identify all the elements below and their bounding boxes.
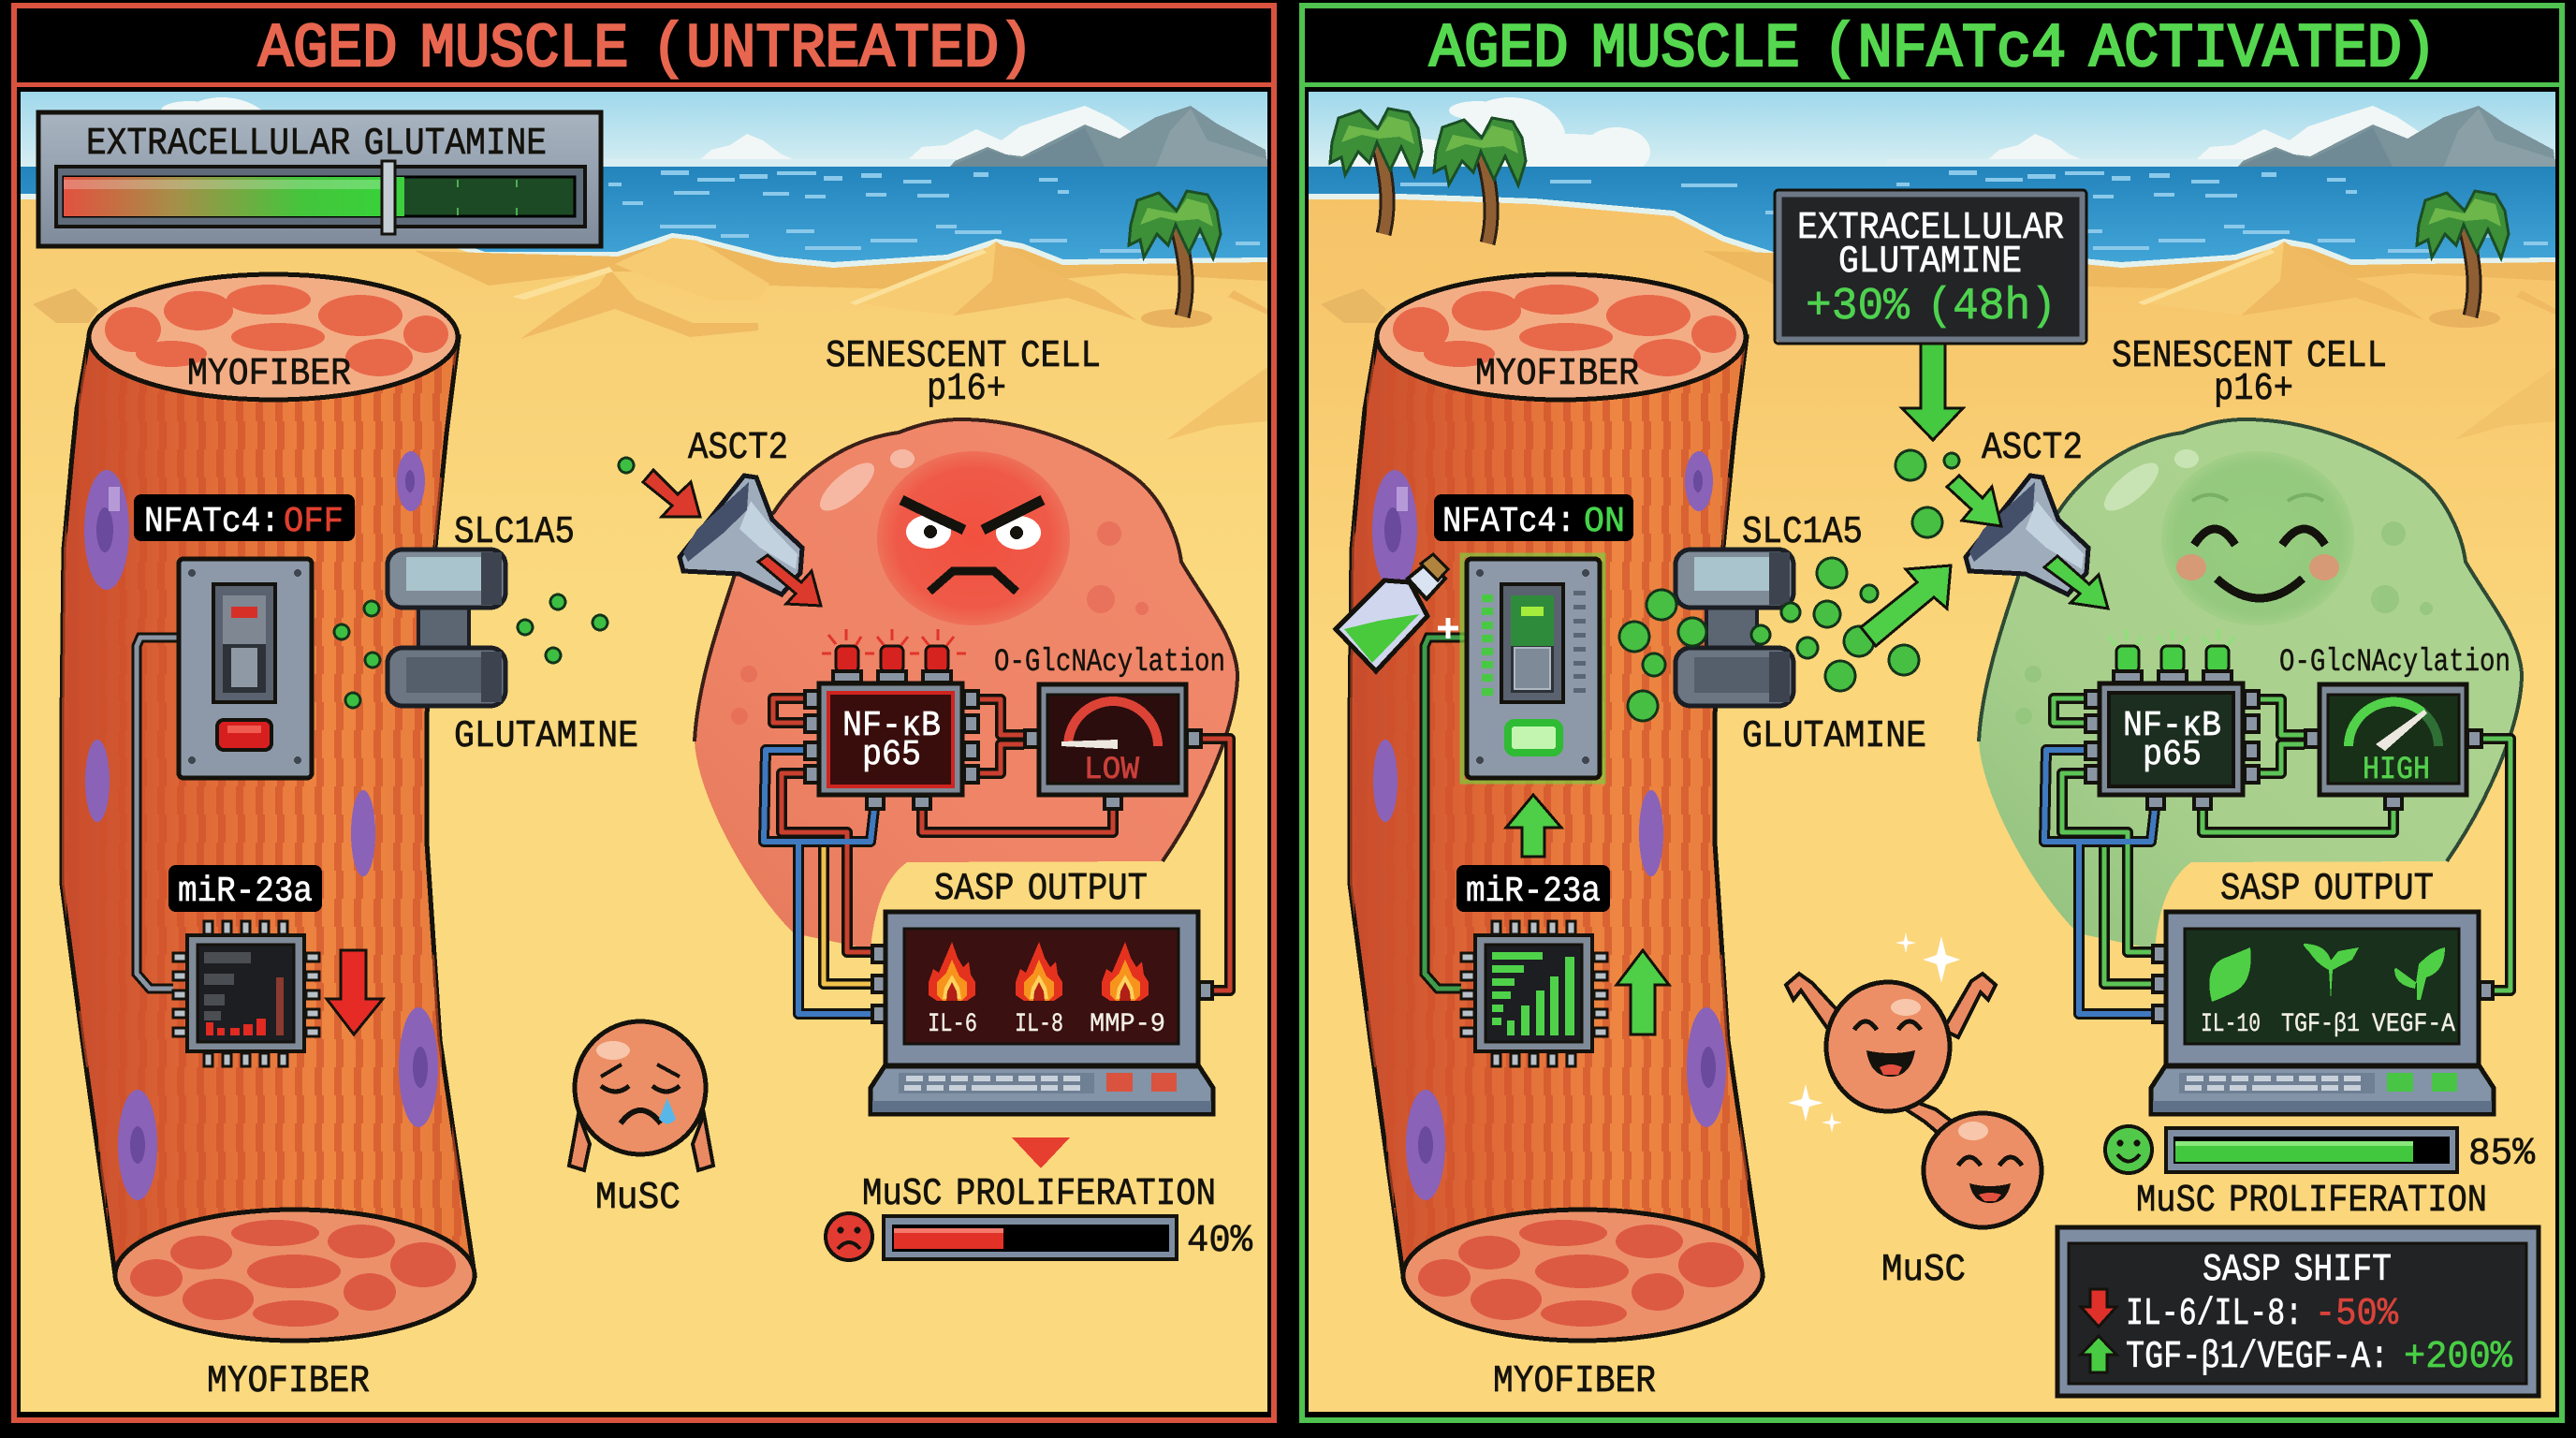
label: myofiber bottom: MYOFIBER: [207, 1360, 370, 1403]
callout: SASP shift: TGF-β1/VEGF-A:: [2126, 1336, 2389, 1379]
chip: NF-κB p65 calm: [2086, 629, 2259, 809]
panel frame: [1302, 6, 2562, 1420]
label: MuSC proliferation: MuSC PROLIFERATION: [862, 1173, 1216, 1216]
title: AGED MUSCLE (UNTREATED): [258, 14, 1033, 84]
wire inner: [1425, 638, 1467, 989]
label: NFATc4 on: ON: [1584, 502, 1625, 542]
chip: NF-κB p65 active: NF-κB: [842, 706, 941, 746]
panel: aged muscle untreated: [14, 6, 1274, 1420]
arrow: into funnel: [643, 470, 700, 517]
myofiber cylinder: [1350, 274, 1763, 1341]
label: glutamine: GLUTAMINE: [1742, 715, 1926, 758]
gauge: high: [2305, 684, 2481, 809]
callout: SASP shift: -50%: [2315, 1293, 2398, 1336]
label: MuSC proliferation: MuSC PROLIFERATION: [2136, 1180, 2487, 1223]
switch on: [1462, 555, 1603, 782]
label: p16+: p16+: [2214, 368, 2293, 411]
label: miR-23a: miR-23a: [1466, 872, 1601, 912]
senescent cell body: [695, 419, 1237, 949]
gauge: low: LOW: [1084, 753, 1140, 788]
laptop: inflammatory SASP: MMP-9: [1090, 1010, 1165, 1039]
circuit wires: [764, 698, 1230, 1014]
laptop: regenerative SASP: IL-10: [2201, 1010, 2261, 1039]
wire: switch to chip: [1425, 638, 1467, 989]
label: O-GlcNAcylation: O-GlcNAcylation: [2279, 645, 2510, 681]
gauge: low: [1025, 684, 1201, 809]
chip: miR-23a high: [1461, 921, 1607, 1066]
label: p16+: p16+: [927, 368, 1006, 411]
arrow: out of funnel: [758, 555, 821, 606]
face: happy: [2176, 494, 2339, 598]
label: glutamine: GLUTAMINE: [454, 715, 638, 758]
header divider: [14, 82, 1274, 87]
arrow: glutamine down: [1902, 344, 1963, 440]
label: NFATc4 on: [1434, 494, 1633, 542]
label: SASP output: SASP OUTPUT: [2220, 868, 2434, 911]
callout: SASP shift: +200%: [2404, 1336, 2512, 1379]
laptop: regenerative SASP: TGF-β1: [2281, 1010, 2360, 1039]
arrow: glutamine uptake diagonal: [1861, 565, 1951, 646]
label: SASP output: SASP OUTPUT: [934, 868, 1148, 911]
panel frame: [14, 6, 1274, 1420]
arrow: miR-23a down: [327, 950, 383, 1034]
arrow: up to switch: [1506, 795, 1561, 857]
chip: NF-κB p65 active: [805, 629, 978, 809]
callout: extracellular glutamine +30%: GLUTAMINE: [1838, 241, 2022, 284]
label: ASCT2: ASCT2: [1982, 427, 2083, 470]
funnel: ASCT2: [1966, 476, 2088, 594]
label: myofiber top: MYOFIBER: [1475, 353, 1639, 396]
wire inner: [137, 638, 179, 989]
panel: aged muscle NFATc4 activated: [1302, 6, 2562, 1420]
label: ASCT2: ASCT2: [688, 427, 788, 470]
potion bottle: [1336, 554, 1448, 671]
pump: SLC1A5: [1676, 550, 1793, 706]
value: 85%: 85%: [2468, 1133, 2535, 1176]
cell: sad MuSC: [569, 1021, 713, 1170]
callout: SASP shift: SASP SHIFT: [2203, 1249, 2392, 1292]
laptop: regenerative SASP: VEGF-A: [2372, 1010, 2455, 1039]
sparkle: plus: [1438, 618, 1458, 638]
arrow: miR-23a up: [1617, 950, 1669, 1034]
chip: NF-κB p65 calm: NF-κB: [2123, 706, 2221, 746]
callout: SASP shift: IL-6/IL-8:: [2126, 1293, 2303, 1336]
title: AGED MUSCLE (NFATc4 ACTIVATED): [1429, 14, 2437, 84]
label: MuSC: MuSC: [595, 1177, 681, 1220]
label: miR-23a: miR-23a: [178, 872, 313, 912]
icon: sad face: [826, 1213, 872, 1260]
label: MuSC: MuSC: [1881, 1249, 1966, 1292]
callout: extracellular glutamine +30%: +30% (48h): [1806, 282, 2056, 332]
funnel: ASCT2: [680, 476, 802, 594]
chip: miR-23a low: [173, 921, 319, 1066]
circuit wires: [2044, 698, 2510, 1014]
label: O-GlcNAcylation: O-GlcNAcylation: [994, 645, 1225, 681]
label: NFATc4 on: NFATc4:: [1442, 502, 1575, 542]
header divider: [1302, 82, 2562, 87]
arrow: out of funnel: [2044, 556, 2108, 609]
label: NFATc4 off: OFF: [284, 502, 344, 542]
cell: dividing happy MuSC: [1786, 974, 2042, 1227]
laptop: inflammatory SASP: [871, 912, 1213, 1114]
senescent cell body: [1979, 419, 2522, 949]
myofiber cylinder: [62, 274, 475, 1341]
laptop: inflammatory SASP: IL-8: [1015, 1010, 1063, 1039]
label: SLC1A5: SLC1A5: [1742, 511, 1863, 554]
glutamine dots abundant: [1619, 450, 2132, 721]
label: senescent cell: SENESCENT CELL: [2112, 335, 2387, 378]
wire: switch to chip: [137, 638, 179, 989]
callout: extracellular glutamine +30%: EXTRACELLULAR: [1797, 207, 2064, 250]
gauge: high: HIGH: [2363, 753, 2430, 788]
callout: SASP shift: [2057, 1227, 2539, 1396]
beach background: [1309, 92, 2555, 1412]
extracellular glutamine slider: EXTRACELLULAR GLUTAMINE: [86, 123, 547, 166]
bar: proliferation 40%: [884, 1216, 1177, 1259]
label: senescent cell: SENESCENT CELL: [826, 335, 1101, 378]
sparkles: [1788, 932, 1960, 1133]
bar: proliferation 85%: [2166, 1128, 2457, 1172]
chip: NF-κB p65 calm: p65: [2143, 735, 2202, 775]
beach background: [21, 92, 1267, 1412]
face: angry: [901, 500, 1043, 592]
pump: SLC1A5: [388, 550, 505, 706]
laptop: inflammatory SASP: IL-6: [928, 1010, 977, 1039]
circuitry group: [2044, 629, 2510, 1114]
arrow: reduced proliferation: [1012, 1137, 1070, 1168]
laptop: regenerative SASP: [2151, 912, 2494, 1114]
arrow: into funnel: [1947, 476, 2001, 526]
switch off: [179, 559, 312, 778]
glutamine dots sparse: [334, 458, 847, 708]
extracellular glutamine slider: [38, 112, 601, 246]
label: myofiber top: MYOFIBER: [187, 353, 351, 396]
chip: NF-κB p65 active: p65: [862, 735, 921, 775]
label: myofiber bottom: MYOFIBER: [1493, 1360, 1656, 1403]
label: NFATc4 off: [134, 494, 355, 542]
value: 40%: 40%: [1187, 1220, 1252, 1263]
callout: extracellular glutamine +30%: [1775, 190, 2086, 344]
label: NFATc4 off: NFATc4:: [144, 502, 280, 542]
label: SLC1A5: SLC1A5: [454, 511, 575, 554]
icon: happy face: [2105, 1126, 2152, 1173]
